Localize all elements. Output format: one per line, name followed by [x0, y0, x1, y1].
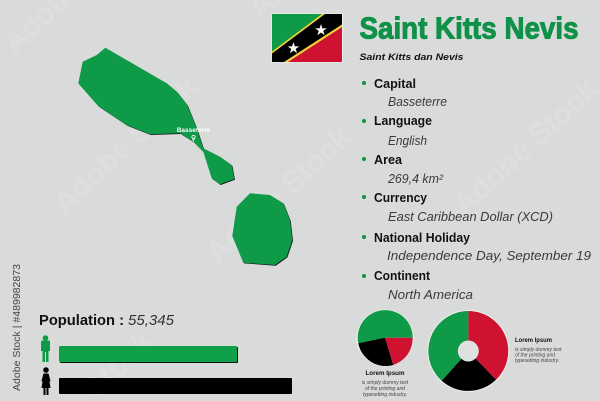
icon: female figure [42, 367, 50, 395]
fact: continent [362, 268, 473, 302]
population heading: 55,345 [128, 313, 175, 329]
capital label: Basseterre: Basseterre [177, 127, 211, 134]
fact: area: Area [374, 152, 403, 167]
subtitle: Saint Kitts dan Nevis [360, 52, 464, 63]
fact: language: English [388, 133, 427, 148]
donut caption: typesetting industry. [515, 358, 559, 364]
donut caption: is simply dummy text [515, 347, 562, 353]
fact: capital [362, 76, 447, 109]
male population bar [59, 346, 238, 363]
text: Adobe Stock [200, 121, 357, 270]
pie caption: small [362, 371, 409, 398]
pie caption: small: Lorem Ipsum [366, 371, 404, 377]
flag of Saint Kitts and Nevis [272, 14, 343, 62]
fact: capital: Basseterre [388, 94, 447, 109]
population heading [39, 313, 175, 329]
flag of Saint Kitts and Nevis: ★ [314, 22, 328, 39]
fact: area: 269,4 km² [387, 171, 444, 186]
pie chart: small [356, 310, 414, 366]
fact: area [362, 152, 444, 186]
capital label: Basseterre [177, 127, 211, 141]
fact: language: Language [374, 113, 432, 128]
donut caption: Lorem Ipsum [515, 338, 552, 344]
fact: continent: North America [388, 287, 473, 302]
stock credit: Adobe Stock | #489982873 [11, 264, 23, 391]
fact: currency [362, 190, 553, 224]
fact: national holiday: National Holiday [374, 230, 471, 245]
icon: male figure [41, 335, 50, 362]
fact: currency: Currency [374, 190, 428, 205]
pie caption: small: is simply dummy text [362, 380, 409, 386]
title: Saint Kitts Nevis [360, 10, 578, 46]
fact: national holiday: Independence Day, September 19 [387, 248, 591, 263]
fact: language [362, 113, 432, 148]
fact: capital: Capital [374, 76, 416, 91]
map: Saint Kitts island [78, 48, 235, 185]
donut chart: large [427, 310, 509, 392]
donut caption [515, 338, 562, 364]
pie caption: small: typesetting industry. [363, 392, 407, 398]
fact: national holiday [362, 230, 591, 263]
donut caption: of the printing and [515, 352, 555, 358]
text: Adobe Stock [447, 73, 600, 222]
flag of Saint Kitts and Nevis: ★ [287, 40, 300, 57]
map: Nevis island [232, 193, 293, 266]
fact: currency: East Caribbean Dollar (XCD) [388, 209, 553, 224]
population heading: Population : [39, 313, 124, 329]
fact: continent: Continent [374, 268, 431, 283]
pie caption: small: of the printing and [365, 386, 405, 392]
facts list [362, 76, 591, 302]
female population bar [59, 378, 292, 394]
text: Adobe Stock [47, 71, 204, 220]
